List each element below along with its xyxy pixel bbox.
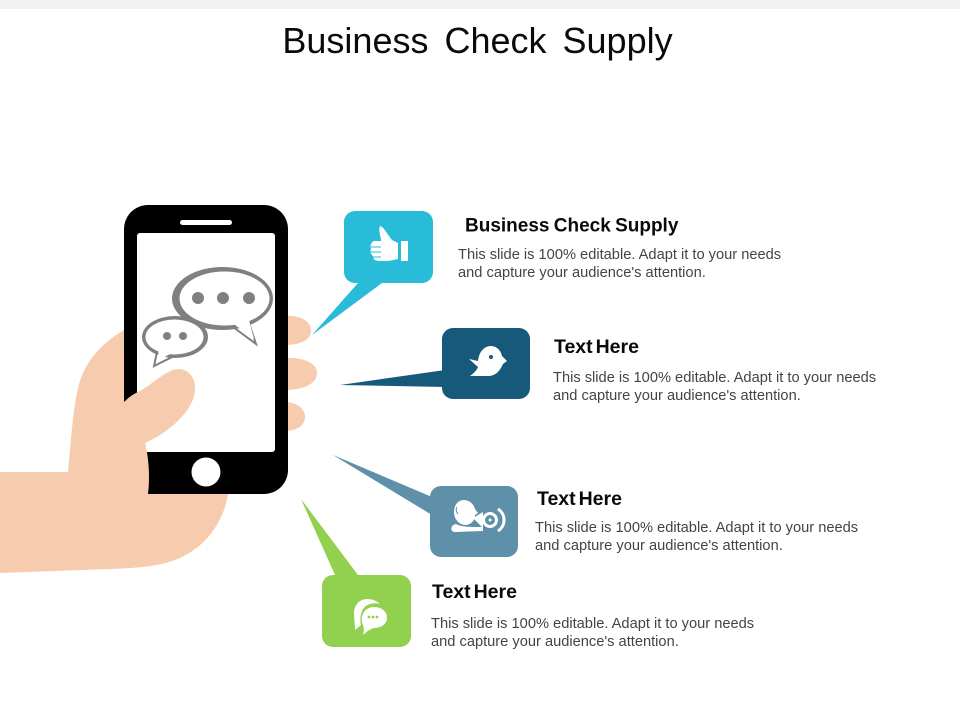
text block 3 <box>535 488 858 554</box>
speaker <box>180 220 232 225</box>
callout 1: thumbs up <box>312 211 433 335</box>
text block 2: and capture your audience's attention. <box>553 388 801 404</box>
icon: chat <box>354 599 387 635</box>
text block 3: Text Here <box>537 488 622 510</box>
callout 2: bird <box>340 328 530 399</box>
illustration: hand holding phone <box>0 205 317 573</box>
text block 2: This slide is 100% editable. Adapt it to your needs <box>553 370 876 386</box>
text block 4 <box>431 581 754 650</box>
text block 1: This slide is 100% editable. Adapt it to your needs <box>458 247 781 263</box>
text block 1 <box>458 216 781 281</box>
text block 1: and capture your audience's attention. <box>458 265 706 281</box>
home button <box>192 458 220 486</box>
icon: bird <box>469 346 507 376</box>
icon: person speaking <box>451 500 504 532</box>
callout 3: speaker <box>333 455 518 557</box>
icon: thumbs up <box>371 226 408 261</box>
phone screen <box>137 233 275 452</box>
text block 1: Business Check Supply <box>465 216 679 236</box>
hand <box>0 329 228 573</box>
fingers <box>285 316 317 431</box>
callout 4: chat <box>301 499 411 647</box>
text block 4: Text Here <box>432 581 517 603</box>
text block 3: and capture your audience's attention. <box>535 538 783 554</box>
phone <box>124 205 288 494</box>
text block 2: Text Here <box>554 336 639 358</box>
chat bubbles <box>142 267 273 366</box>
text block 4: This slide is 100% editable. Adapt it to your needs <box>431 616 754 632</box>
thumb and palm overlap <box>124 369 195 494</box>
text block 4: and capture your audience's attention. <box>431 634 679 650</box>
text block 3: This slide is 100% editable. Adapt it to your needs <box>535 520 858 536</box>
title: Business Check Supply <box>282 20 673 61</box>
text block 2 <box>553 336 876 404</box>
